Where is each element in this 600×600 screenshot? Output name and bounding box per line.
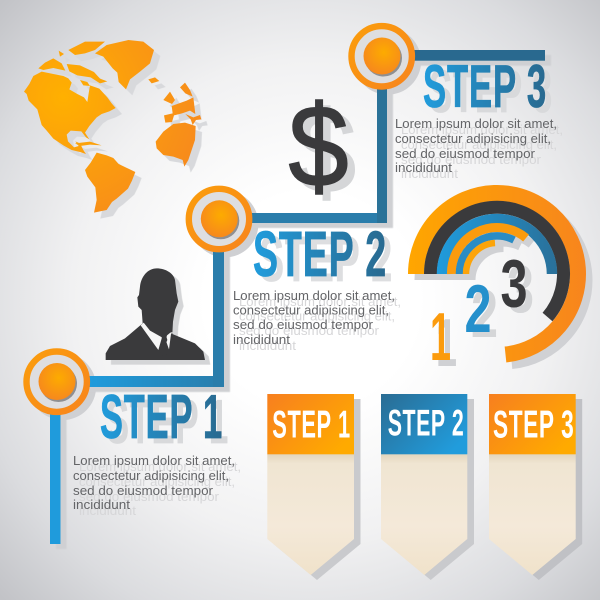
text block: step 1: sed do eiusmod tempor (73, 484, 213, 498)
number 1 (430, 299, 457, 381)
icon: dollar sign: $ (296, 87, 356, 217)
tie (160, 336, 168, 357)
panel: tag step 2: STEP 2 (388, 403, 464, 444)
arc: blue (442, 219, 552, 274)
arc: blue inner (459, 236, 514, 274)
heading: step 2 (253, 218, 393, 295)
text block: step 2: consectetur adipisicing elit, (233, 304, 389, 318)
arc: outer orange (416, 193, 578, 354)
connector line: step 1 (50, 230, 224, 544)
map: north america (24, 72, 116, 154)
text block: step 3: Lorem ipsum dolor sit amet, (395, 117, 557, 131)
number 2: 2 (471, 276, 498, 352)
text block: step 1: incididunt (73, 498, 131, 512)
map: iceland (148, 77, 159, 83)
arc shadows (422, 199, 584, 361)
text block: step 3: sed do eiusmod tempor (395, 147, 535, 161)
text block: step 2: consectetur adipisicing elit, (239, 310, 395, 324)
text block: step 3: sed do eiusmod tempor (401, 153, 541, 167)
connector line: step 2 (240, 70, 387, 223)
text block: step 3: incididunt (401, 167, 459, 181)
icon: businessman (106, 268, 205, 360)
number 3: 3 (507, 251, 534, 327)
text block: step 3: consectetur adipisicing elit, (401, 138, 557, 152)
node: step 2 (189, 189, 249, 249)
connector line: step 3 (400, 50, 545, 61)
text block: step 1: Lorem ipsum dolor sit amet, (73, 454, 235, 468)
panel: tag step 3 (489, 394, 582, 580)
text block: step 2: sed do eiusmod tempor (239, 324, 379, 338)
map: south america (85, 153, 135, 213)
node: step 3 (352, 26, 412, 86)
node: step 1 (26, 352, 87, 412)
number 1: 1 (430, 299, 451, 375)
chart: concentric arc gauge (416, 193, 584, 361)
number 3: 3 (500, 246, 528, 322)
text block: step 1: consectetur adipisicing elit, (73, 469, 229, 483)
panel: tag step 1: STEP 1 (272, 404, 351, 447)
number 1: 1 (436, 305, 457, 381)
panel: tag step 1 (267, 394, 360, 580)
text block: step 1: sed do eiusmod tempor (79, 490, 219, 504)
heading: step 1: STEP 1 (106, 388, 229, 457)
text block: step 2: incididunt (233, 333, 291, 347)
text block: step 2: incididunt (239, 339, 297, 353)
heading: step 2: STEP 2 (253, 218, 387, 290)
heading: step 3 (423, 53, 553, 125)
text block: step 2: Lorem ipsum dolor sit amet, (239, 295, 401, 309)
text block: step 1: consectetur adipisicing elit, (79, 475, 235, 489)
map: greenland (95, 40, 154, 89)
text block: step 2: Lorem ipsum dolor sit amet, (233, 289, 395, 303)
text block: step 1: Lorem ipsum dolor sit amet, (79, 460, 241, 474)
heading: step 1: STEP 1 (100, 383, 223, 452)
arc: dark (430, 207, 563, 317)
panel: tag step 2 (381, 394, 474, 580)
text block: step 2 (233, 289, 401, 353)
shirt collar (141, 323, 173, 350)
text block: step 2: sed do eiusmod tempor (233, 318, 373, 332)
text block: step 3 (395, 117, 563, 181)
map: europe (163, 83, 201, 125)
arc: orange middle (451, 228, 526, 274)
node shadows (29, 28, 421, 420)
map: arctic islands (38, 42, 107, 146)
text block: step 3: Lorem ipsum dolor sit amet, (401, 123, 563, 137)
text block: step 3: incididunt (395, 161, 453, 175)
text block: step 1 (73, 454, 241, 518)
icon: dollar sign: $ (288, 81, 348, 211)
text block: step 3: consectetur adipisicing elit, (395, 132, 551, 146)
map: africa (156, 123, 196, 167)
text block: step 1: incididunt (79, 504, 137, 518)
arc: orange inner (466, 243, 495, 274)
heading: step 1 (100, 383, 229, 457)
world map (24, 40, 201, 213)
heading: step 2: STEP 2 (259, 223, 393, 295)
number 2: 2 (464, 271, 492, 347)
